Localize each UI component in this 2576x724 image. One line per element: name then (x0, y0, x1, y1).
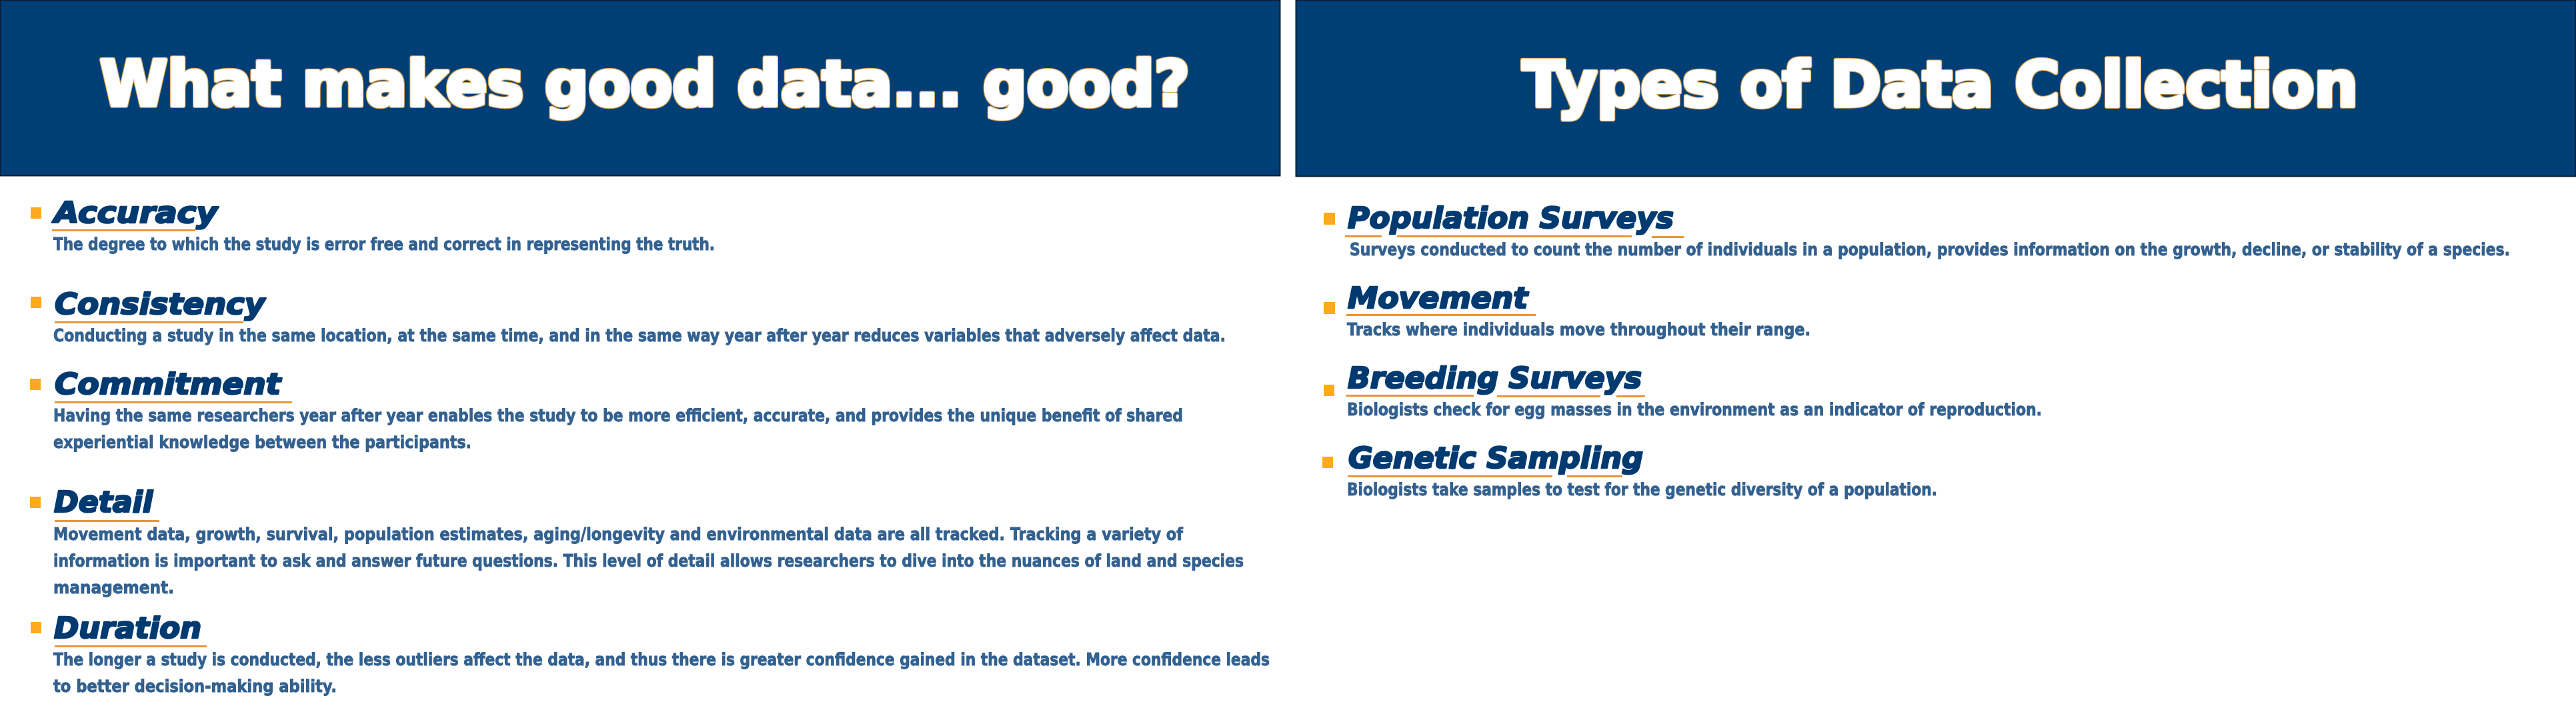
item: Detail: Movement data, growth, survival, population estimates, aging/longevity and environmental data are all tracked. Tracking a variety of (53, 525, 1184, 545)
item: Detail: information is important to ask and answer future questions. This level of detail allows researchers to dive into the nuances of land and species (53, 551, 1244, 571)
item: Breeding Surveys: Breeding Surveys (1348, 361, 1642, 395)
item: Consistency: Consistency (55, 287, 266, 321)
item: Breeding Surveys: Biologists check for egg masses in the environment as an indicator of reproduction. (1347, 400, 2042, 420)
item: Detail: Detail (54, 485, 153, 519)
item: Detail: management. (53, 578, 174, 598)
item: Population Surveys: Population Surveys (1348, 201, 1674, 235)
item: Genetic Sampling: Genetic Sampling (1348, 441, 1643, 475)
title: What makes good data... good?: What makes good data... good? (100, 48, 1190, 121)
item: Consistency: Conducting a study in the same location, at the same time, and in the same way year after year reduces variables that adversely affect data. (53, 326, 1226, 346)
item: Commitment (30, 367, 1183, 453)
item: Commitment: experiential knowledge between the participants. (53, 433, 471, 453)
item: Movement (1324, 281, 1810, 340)
item: Duration: The longer a study is conducted, the less outliers affect the data, and thus there is greater confidence gained in the dataset. More confidence leads (53, 650, 1270, 670)
item: Commitment: Having the same researchers year after year enables the study to be more efficient, accurate, and provides the unique benefit of shared (53, 406, 1183, 426)
item: Accuracy: The degree to which the study is error free and correct in representing the truth. (53, 235, 715, 255)
item: Duration: Duration (54, 611, 201, 645)
title: Types of Data Collection: Types of Data Collection (1522, 49, 2358, 121)
item: Movement: Movement (1348, 281, 1529, 315)
item: Population Surveys (1324, 201, 2510, 260)
item: Movement: Tracks where individuals move throughout their range. (1347, 320, 1810, 340)
item: Duration (31, 611, 1270, 697)
panel: what makes good data (0, 0, 1280, 697)
item: Duration: to better decision-making ability. (53, 677, 337, 697)
item: Accuracy (31, 196, 715, 255)
item: Breeding Surveys (1324, 361, 2042, 420)
item: Accuracy: Accuracy (52, 196, 219, 230)
header banner: left (0, 0, 1280, 176)
item: Genetic Sampling: Biologists take samples to test for the genetic diversity of a population. (1347, 480, 1937, 500)
item: Consistency (31, 287, 1226, 346)
item: Detail (30, 485, 1244, 598)
panel: types of data collection (1296, 0, 2575, 500)
item: Commitment: Commitment (55, 367, 282, 401)
header banner: right (1296, 0, 2575, 176)
item: Genetic Sampling (1322, 441, 1937, 500)
